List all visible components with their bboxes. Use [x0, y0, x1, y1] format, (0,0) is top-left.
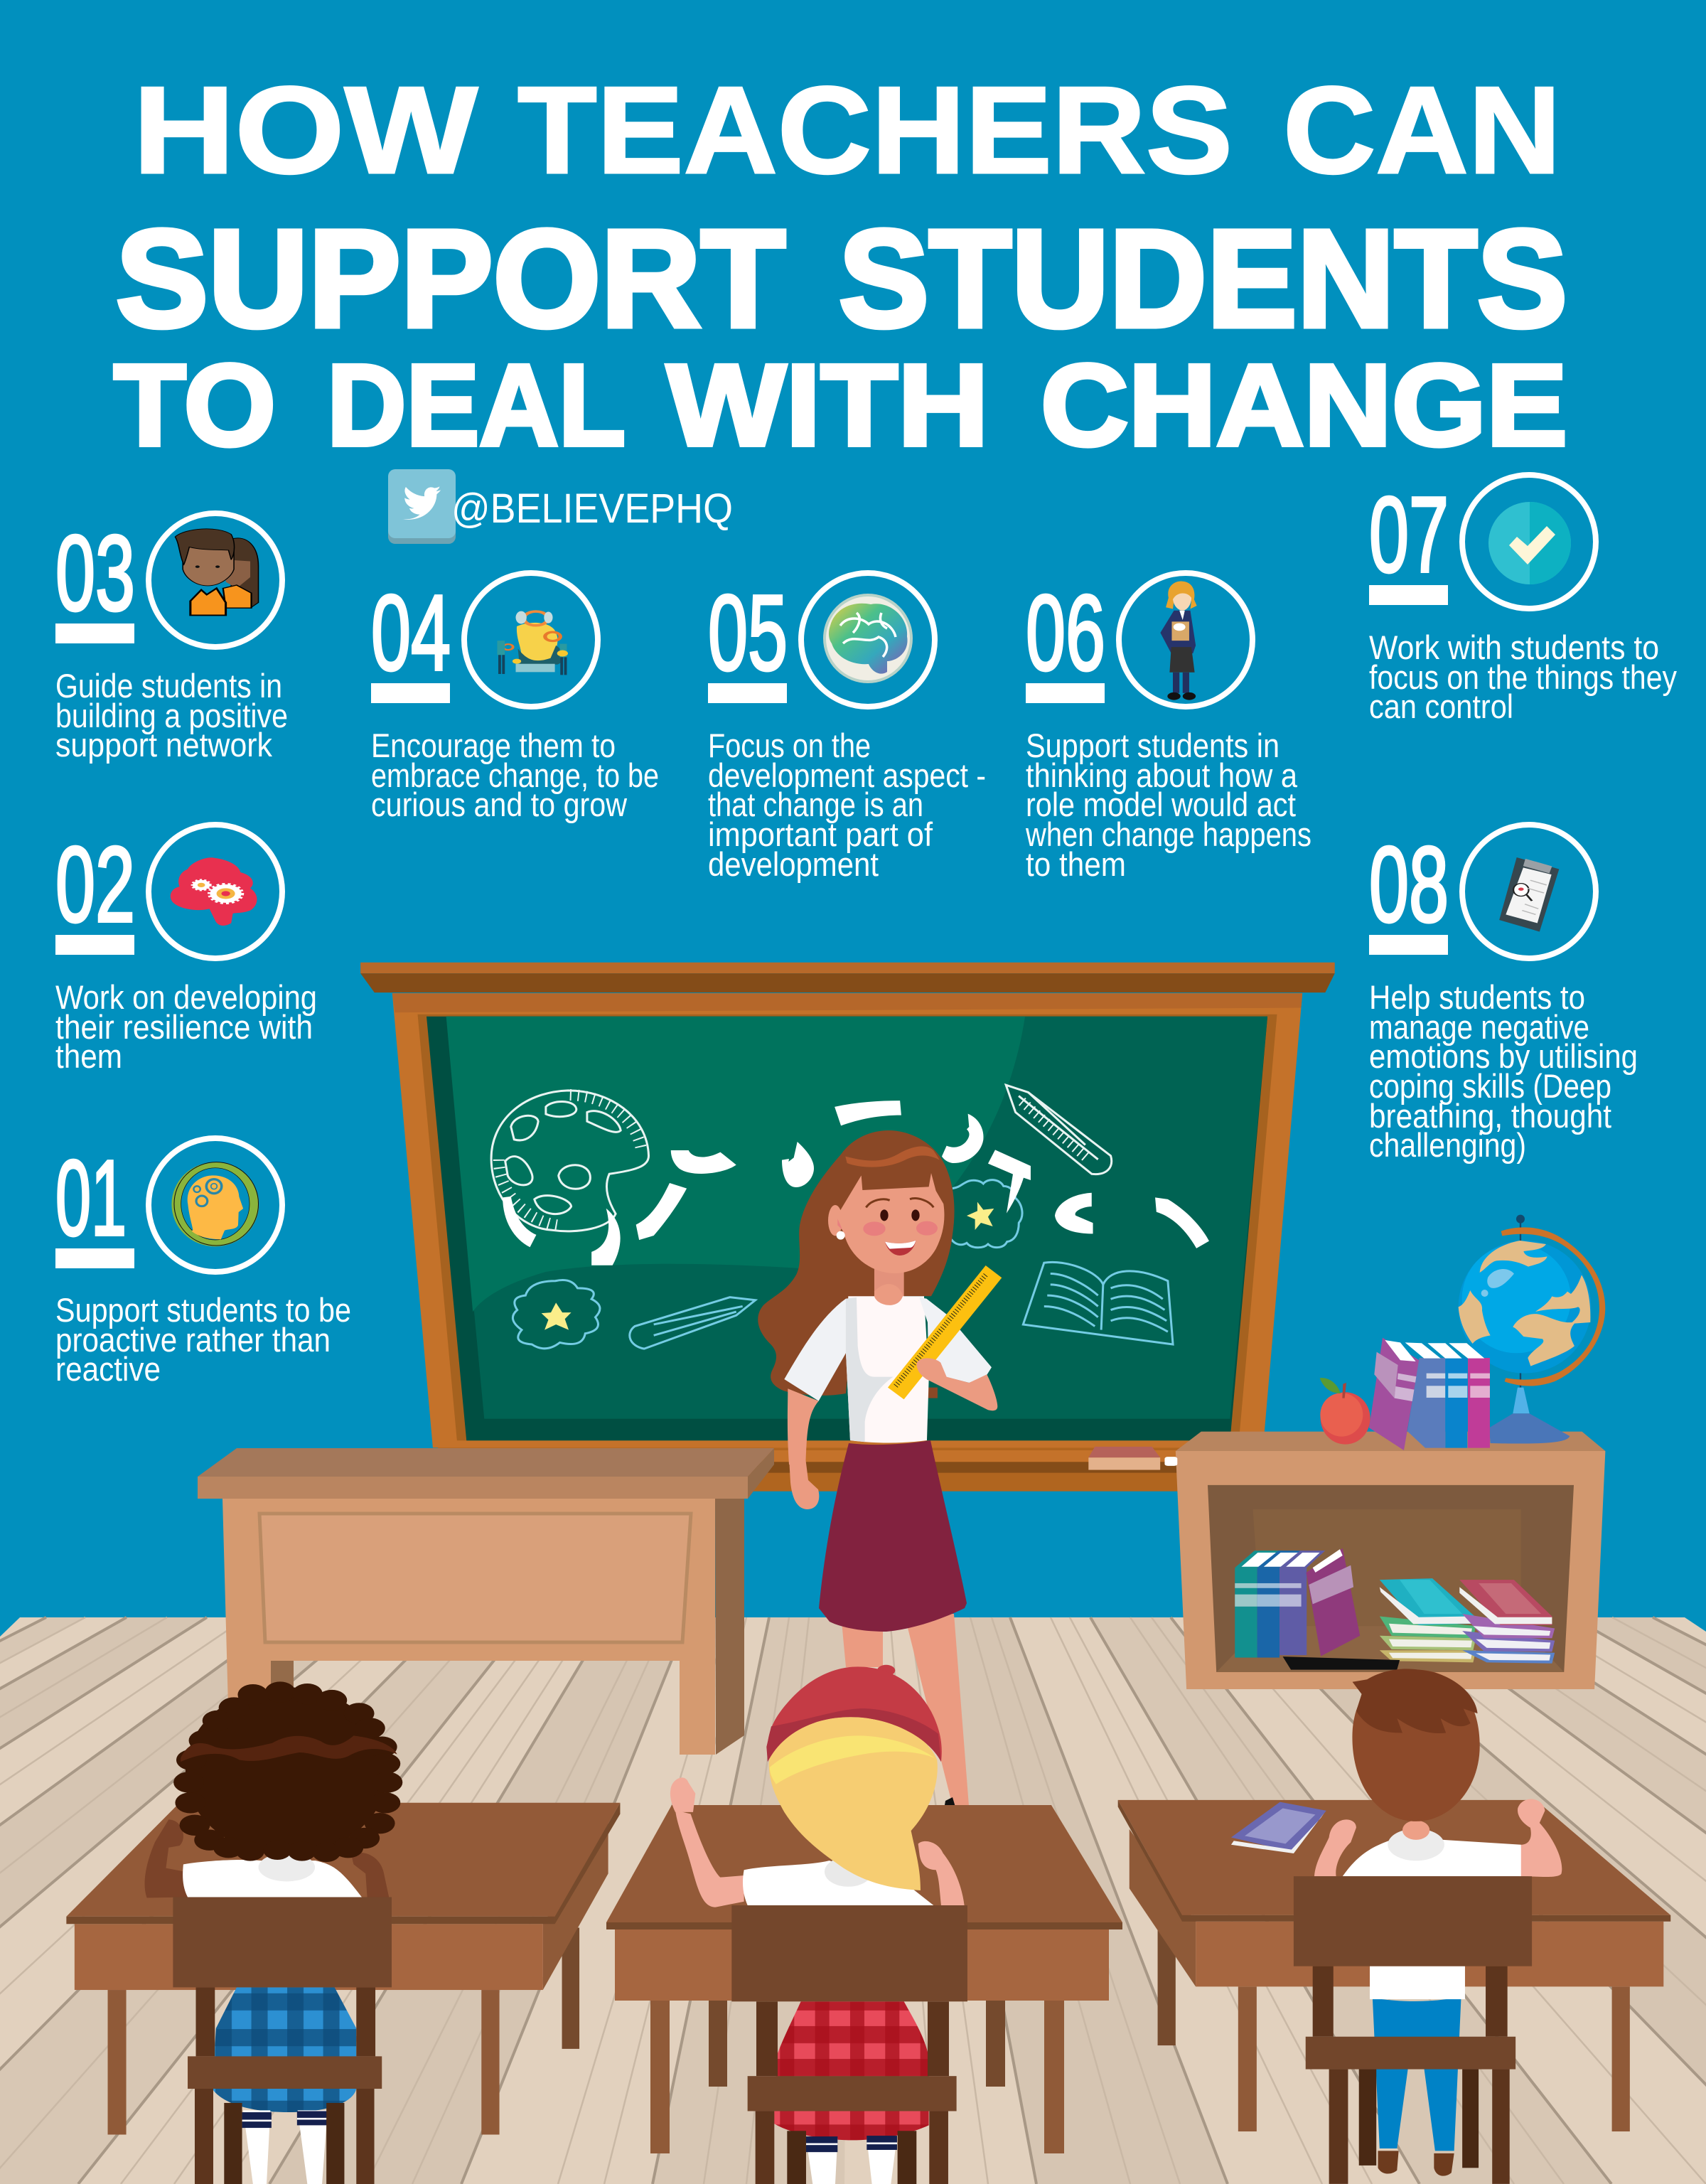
description 05: that change is an — [708, 786, 923, 823]
shelf book stack, teal — [1380, 1578, 1476, 1662]
description 05: development aspect - — [708, 756, 986, 794]
description 06: role model would act — [1026, 786, 1296, 823]
icon: clipboard — [1499, 857, 1559, 931]
description 04: Encourage them to — [371, 727, 616, 764]
bookshelf — [1176, 1432, 1605, 1689]
description 06 — [1025, 727, 1311, 883]
chalkboard — [360, 963, 1335, 1492]
upper body — [758, 1130, 1002, 1465]
item 03 — [55, 513, 288, 764]
icon: check mark — [1488, 502, 1571, 584]
blonde hair — [769, 1717, 938, 1890]
board tray — [438, 1440, 1263, 1492]
description 08: Help students to — [1369, 978, 1585, 1016]
blouse — [846, 1296, 929, 1442]
description 05 — [708, 727, 986, 883]
socks — [806, 2138, 837, 2184]
item 06 — [1025, 572, 1311, 883]
student desk middle — [606, 1805, 1122, 2153]
arms — [788, 1388, 819, 1465]
description 03: building a positive — [55, 697, 288, 734]
item 02 — [55, 824, 317, 1075]
student left: curly hair girl — [145, 1681, 402, 2184]
title: TEACHERS — [517, 60, 1233, 199]
chair — [173, 1897, 392, 2184]
title: DEAL — [327, 340, 626, 470]
lower arm — [789, 1457, 819, 1509]
teacher's desk — [198, 1448, 774, 1755]
title: WITH — [667, 340, 989, 470]
item 03: 03 — [55, 513, 135, 633]
student middle: blonde girl — [670, 1665, 967, 2184]
description 08: coping skills (Deep — [1369, 1067, 1611, 1105]
board frame — [360, 963, 1335, 1447]
title: STUDENTS — [839, 201, 1567, 356]
item 07: 07 — [1369, 474, 1449, 594]
item 08 — [1369, 824, 1638, 1164]
description 08: challenging) — [1369, 1126, 1526, 1164]
item 07 — [1369, 474, 1677, 725]
chalk doodle: open book — [1023, 1262, 1173, 1344]
description 04: curious and to grow — [371, 786, 628, 823]
description 03: Guide students in — [55, 667, 282, 705]
apple — [1320, 1378, 1370, 1445]
item 01: 01 — [55, 1138, 127, 1258]
chair — [1294, 1876, 1532, 2184]
description 01: proactive rather than — [55, 1321, 331, 1359]
teacher — [758, 1130, 1002, 1809]
arms — [1314, 1819, 1356, 1876]
description 03: support network — [55, 726, 272, 764]
book on desk — [1231, 1802, 1326, 1853]
item 06: 06 — [1026, 572, 1105, 692]
chair — [731, 1905, 967, 2184]
globe — [1459, 1215, 1605, 1444]
red beret — [766, 1665, 942, 1762]
shirt — [183, 1860, 362, 1897]
ruler — [888, 1265, 1002, 1399]
skirt — [819, 1440, 967, 1632]
pants and shoes — [1370, 1966, 1465, 2176]
description 02: Work on developing — [55, 978, 317, 1016]
description 08: emotions by utilising — [1369, 1037, 1638, 1075]
description 06: thinking about how a — [1026, 756, 1298, 794]
description 04: embrace change, to be — [371, 756, 659, 794]
icon: red brain with gears — [171, 857, 257, 926]
item 01 — [55, 1138, 351, 1388]
plaid skirt — [773, 2001, 929, 2140]
title: TO — [114, 340, 276, 470]
description 08 — [1369, 978, 1638, 1164]
globe, books and apple on shelf — [1320, 1215, 1605, 1450]
description 02: them — [55, 1037, 122, 1075]
white chalk fragments — [503, 1101, 1209, 1265]
icon: two people — [175, 529, 259, 615]
shirt — [743, 1861, 933, 1905]
chalk doodle: palette — [491, 1091, 649, 1231]
description 05: development — [708, 845, 879, 883]
description 01: reactive — [55, 1350, 161, 1388]
floor — [0, 1617, 1706, 2184]
board surface — [426, 1017, 1267, 1440]
description 07: Work with students to — [1369, 628, 1659, 666]
arm — [675, 1810, 744, 1907]
student desk and boy right — [1118, 1669, 1670, 2184]
description 04 — [371, 727, 659, 823]
description 07 — [1369, 628, 1677, 725]
description 08: manage negative — [1369, 1008, 1589, 1046]
title: CHANGE — [1041, 340, 1567, 470]
item 02: 02 — [55, 824, 135, 944]
shelf books, upright — [1235, 1548, 1360, 1658]
description 02 — [55, 978, 317, 1075]
twitter handle: @BELIEVEPHQ — [451, 486, 733, 532]
item 08: 08 — [1369, 824, 1449, 944]
student desk left — [66, 1803, 620, 2135]
description 01 — [55, 1291, 351, 1388]
description 08: breathing, thought — [1369, 1097, 1611, 1135]
description 05: important part of — [708, 815, 933, 853]
plaid skirt — [212, 1987, 356, 2112]
description 07: can control — [1369, 687, 1513, 725]
boy's head — [1352, 1670, 1480, 1821]
description 03 — [55, 667, 288, 764]
description 01: Support students to be — [55, 1291, 351, 1329]
description 05: Focus on the — [708, 727, 871, 764]
desk — [1118, 1800, 1670, 2131]
description 06: Support students in — [1026, 727, 1280, 764]
item 05: 05 — [708, 572, 788, 692]
socks — [243, 2110, 270, 2184]
icon: colourful brain — [825, 595, 911, 682]
title: HOW — [133, 60, 478, 199]
face — [828, 1173, 944, 1273]
chalk doodle: pencil top right — [1006, 1085, 1112, 1174]
title — [114, 60, 1567, 470]
eraser and chalk — [1088, 1447, 1177, 1470]
chalk doodle: cloud with star, bottom — [513, 1280, 600, 1349]
shelf book stack, red — [1459, 1580, 1555, 1664]
arms — [145, 1819, 188, 1898]
curly hair — [173, 1681, 402, 1862]
icon: head with gears and figures — [497, 611, 568, 675]
description 06: when change happens — [1025, 815, 1311, 853]
chalk doodle: pencil bottom left — [630, 1297, 756, 1349]
icon: head with gears — [171, 1162, 259, 1246]
item 04: 04 — [371, 572, 451, 692]
description 02: their resilience with — [55, 1008, 313, 1046]
shirt — [1343, 1840, 1521, 1876]
item 05 — [708, 572, 986, 883]
standing books — [1369, 1338, 1490, 1450]
twitter handle — [388, 469, 733, 544]
description 06: to them — [1026, 845, 1126, 883]
fallen ruler — [1283, 1656, 1400, 1670]
legs — [841, 1614, 969, 1809]
title: SUPPORT — [116, 201, 785, 356]
icon: standing school girl — [1160, 582, 1197, 700]
title: CAN — [1283, 60, 1561, 199]
item 04 — [371, 572, 659, 823]
